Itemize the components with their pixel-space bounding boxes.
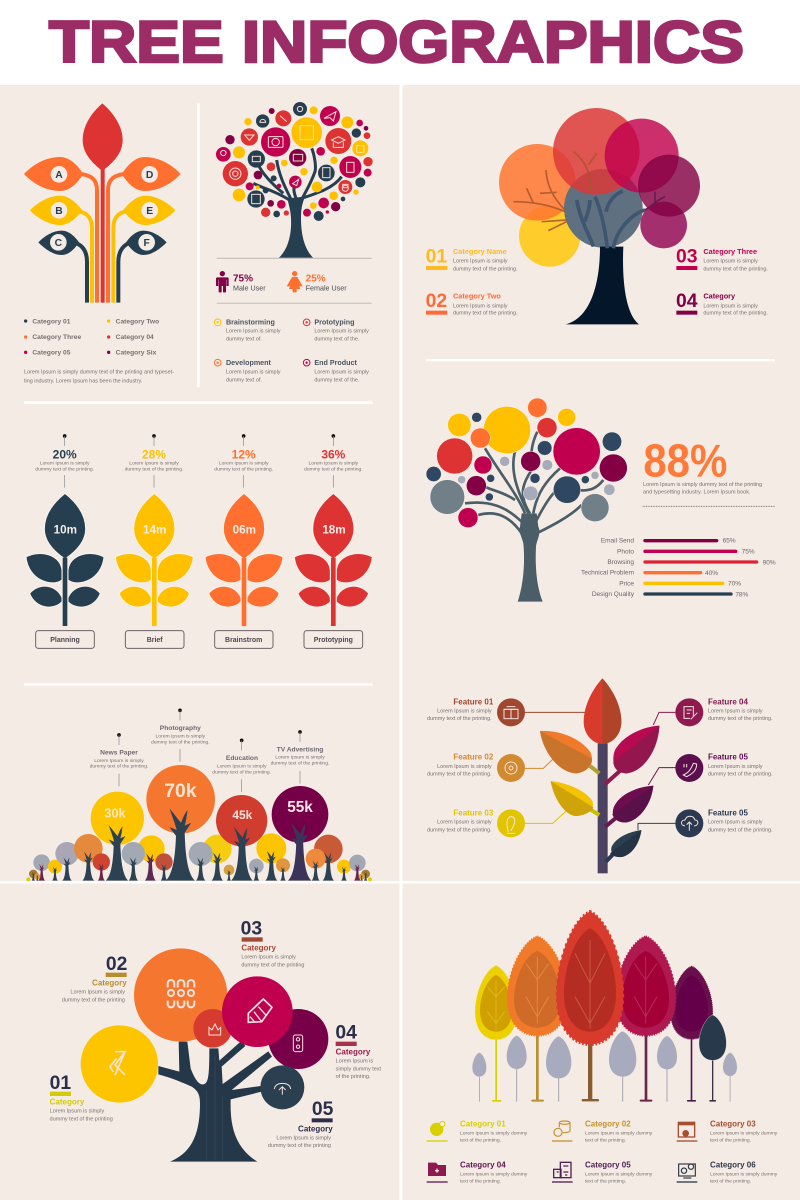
feature 03: dummy text of the printing. (427, 827, 492, 833)
plant brainstorm: 06m (233, 523, 256, 536)
legend category 06 (677, 1161, 778, 1184)
item prototyping: dummy text of the. (314, 337, 360, 343)
feature 05 cloud: Feature 05 (708, 808, 748, 817)
label 04: Lorem Ipsum is simply (703, 303, 758, 309)
leaf D (122, 157, 181, 191)
label 03: dummy text of the printing (241, 962, 304, 968)
bar chart: 78% (735, 592, 749, 599)
feature 04: Lorem Ipsum is simply (708, 709, 763, 715)
plant brief: 28% (142, 448, 166, 462)
item brainstorming: Lorem Ipsum is simply (226, 329, 281, 335)
category legend: Category Six (116, 350, 157, 357)
plant planning (26, 434, 104, 648)
legend category 02: text of the printing. (585, 1137, 626, 1143)
feature 05 phone: dummy text of the printing. (708, 772, 773, 778)
panel: leaf forest (427, 912, 778, 1184)
legend category 04: Category 04 (460, 1161, 506, 1170)
item development (214, 359, 281, 383)
circle 02 orange (134, 948, 227, 1042)
feature 02: Lorem Ipsum is simply (437, 764, 492, 770)
item development: Development (226, 359, 272, 367)
label 02: dummy text of the printing. (453, 311, 518, 317)
label 05: Lorem Ipsum is simply (276, 1136, 331, 1142)
branches (513, 152, 665, 248)
divider upper (217, 258, 372, 259)
label 04: Category (336, 1048, 371, 1057)
plum leaf (612, 786, 653, 822)
bar chart: 90% (763, 559, 776, 566)
item development: dummy text of. (226, 377, 262, 383)
yellow leaf tree (475, 966, 517, 1102)
leaf B: B (55, 206, 63, 217)
label 01: dummy text of the printing. (453, 266, 518, 272)
female user stat (287, 271, 347, 292)
legend category 05: text of the printing. (585, 1178, 626, 1184)
plant prototyping (294, 434, 372, 648)
label 04 (676, 291, 768, 317)
stem and side twigs (590, 743, 622, 873)
tree 30k news paper: Lorem Ipsum is simply (94, 758, 144, 764)
panel: 88 percent tree (426, 398, 776, 602)
item end product: Lorem Ipsum is simply (314, 369, 369, 375)
feature 03: Lorem Ipsum is simply (437, 820, 492, 826)
label 01: 01 (50, 1073, 71, 1094)
legend category 06: Category 06 (710, 1161, 756, 1170)
plant planning: 20% (53, 448, 77, 462)
plant brief: 14m (143, 523, 166, 536)
tree 55k tv advertising: dummy text of the printing. (271, 761, 329, 767)
label 04: of the printing. (336, 1074, 371, 1080)
tree 70k photography: 70k (164, 781, 197, 802)
female user stat: Female User (306, 284, 347, 292)
tree 45k education: 45k (232, 808, 253, 822)
circle 03 crimson (222, 976, 293, 1047)
plant prototyping: dummy text of the printing. (304, 467, 363, 473)
male user stat: 75% (233, 274, 253, 285)
label 02: 02 (106, 954, 127, 975)
feature 05 phone: Feature 05 (708, 753, 748, 762)
legend category 01 (427, 1120, 528, 1143)
bar chart: 40% (705, 570, 718, 577)
leaf E (123, 196, 175, 225)
paragraph: Lorem Ipsum is simply dummy text of the printing and typeset- (24, 370, 174, 376)
label 05 (268, 1099, 334, 1149)
legend category 01: text of the printing. (460, 1137, 501, 1143)
plant brainstorm: dummy text of the printing. (214, 467, 273, 473)
label 03: dummy text of the printing. (703, 266, 768, 272)
feature 01: Lorem Ipsum is simply (437, 709, 492, 715)
label 02: dummy text of the printing (62, 997, 125, 1003)
panel: forest stats (24, 683, 373, 881)
legend category 05: Lorem Ipsum is simply dummy (585, 1172, 653, 1178)
crimson leaf tree (616, 936, 676, 1102)
leaf A: A (55, 170, 63, 181)
legend category 05: Category 05 (585, 1161, 631, 1170)
plant prototyping: 36% (321, 448, 346, 462)
horizontal divider (24, 401, 373, 404)
feature 01: dummy text of the printing. (427, 716, 492, 722)
paragraph: ting industry. Lorem Ipsum has been the industry. (24, 378, 143, 384)
circle 01 yellow (81, 1025, 158, 1103)
label 03 (241, 918, 304, 968)
bar chart: Price (619, 580, 634, 587)
plant brainstorm: Lorem Ipsum is simply (219, 460, 269, 466)
panel: icon tree (214, 102, 373, 383)
feature 05 phone (675, 753, 773, 782)
tree 70k photography: dummy text of the printing. (151, 740, 210, 746)
paragraph: and typesetting industry. Lorem Ipsum book. (643, 489, 751, 495)
tree 55k tv advertising (271, 730, 329, 881)
feature 01 (427, 697, 525, 726)
tree 30k news paper: 30k (104, 806, 127, 820)
female user stat: 25% (306, 274, 326, 285)
label 02: Category Two (453, 292, 501, 301)
tree 45k education: Education (226, 755, 258, 762)
tree 30k news paper: dummy text of the printing. (90, 764, 148, 770)
circle 04 plum (268, 1009, 328, 1069)
foliage icons (221, 106, 364, 204)
legend category 06: Lorem Ipsum is simply dummy (710, 1172, 778, 1178)
leaf E: E (146, 206, 153, 217)
panel: ABC leaf stems (24, 103, 373, 404)
legend category 04 (427, 1161, 528, 1184)
feature 02: dummy text of the printing. (427, 772, 492, 778)
tree 45k education: dummy text of the printing. (212, 769, 271, 775)
small trees (26, 833, 372, 881)
feature 03: Feature 03 (453, 808, 494, 817)
label 03: 03 (241, 918, 262, 939)
label 02: Category (92, 979, 127, 988)
grey background leaf trees (472, 1031, 737, 1102)
dark leaf (610, 830, 641, 857)
legend category 05 (552, 1161, 653, 1184)
plant brainstorm: Brainstrom (225, 637, 262, 644)
label 02: 02 (426, 291, 447, 312)
leaf stems (77, 168, 128, 303)
feature 05 cloud: dummy text of the printing. (708, 827, 773, 833)
plant brief (115, 434, 193, 648)
yellow leaf (551, 781, 593, 816)
feature 04: Feature 04 (708, 697, 748, 706)
label 01: Category (50, 1098, 85, 1107)
plant prototyping: Prototyping (314, 637, 353, 644)
label 02 (426, 291, 518, 317)
divider (426, 359, 775, 361)
tree 55k tv advertising: TV Advertising (277, 747, 323, 754)
label 03: Category (241, 943, 276, 952)
feature 04 (675, 697, 773, 726)
plant brainstorm: 12% (232, 448, 256, 462)
translucent canopy (499, 108, 700, 267)
title band (0, 0, 800, 85)
plant planning: Lorem Ipsum is simply (40, 460, 90, 466)
tree 70k photography: Photography (160, 725, 201, 732)
label 02: Lorem Ipsum is simply (453, 303, 508, 309)
plant planning: dummy text of the printing. (35, 467, 94, 473)
feature 04: dummy text of the printing. (708, 716, 773, 722)
trunk and branches (158, 1041, 272, 1162)
label 01: Lorem Ipsum is simply (453, 258, 508, 264)
bar chart: Photo (617, 548, 634, 555)
item end product (303, 359, 369, 383)
label 03: Lorem Ipsum is simply (241, 955, 296, 961)
tree 70k photography: Lorem Ipsum is simply (156, 733, 206, 739)
legend category 02 (552, 1120, 653, 1143)
tree 45k education (212, 738, 271, 881)
bar chart: Browsing (607, 559, 634, 566)
label 03: Lorem Ipsum is simply (703, 258, 758, 264)
bar chart: Email Send (601, 538, 634, 545)
label 02 (62, 954, 127, 1003)
category legend (24, 318, 159, 357)
feature 01: Feature 01 (453, 697, 494, 706)
feature 05 phone: Lorem Ipsum is simply (708, 764, 763, 770)
legend category 02: Lorem Ipsum is simply dummy (585, 1131, 653, 1137)
category legend: Category 04 (116, 334, 154, 341)
leaf F: F (144, 238, 150, 249)
category legend: Category Three (32, 334, 81, 341)
top red leaf (584, 678, 621, 744)
plant brief: Lorem Ipsum is simply (129, 460, 179, 466)
dotted divider (643, 505, 775, 508)
label 05: 05 (312, 1099, 334, 1120)
label 04: Lorem Ipsum is (336, 1059, 373, 1065)
legend category 01: Lorem Ipsum is simply dummy (460, 1131, 528, 1137)
leaf C (38, 231, 79, 255)
item brainstorming: Brainstorming (226, 318, 275, 326)
label 01 (426, 246, 518, 272)
tree 55k tv advertising: 55k (287, 799, 313, 816)
legend category 03: text of the printing. (710, 1137, 751, 1143)
divider (24, 683, 373, 686)
bar chart: Technical Problem (581, 570, 634, 577)
tree trunk and branches (465, 432, 603, 602)
feature 05 cloud: Lorem Ipsum is simply (708, 820, 763, 826)
tree 45k education: Lorem Ipsum is simply (217, 763, 267, 769)
leaf F (126, 231, 167, 255)
plant planning: 10m (54, 523, 77, 536)
vertical divider (197, 103, 200, 387)
item prototyping (303, 318, 369, 343)
circle crown red (193, 1009, 232, 1048)
divider lower (217, 303, 372, 304)
plant planning: Planning (50, 637, 80, 644)
label 02: Lorem Ipsum is simply (70, 990, 125, 996)
panel: translucent circle tree (426, 108, 775, 361)
plum leaf tree (671, 966, 713, 1102)
feature 03 (427, 808, 525, 837)
item brainstorming (214, 318, 281, 343)
item end product: dummy text of the. (314, 377, 360, 383)
circle 05 dark (260, 1065, 304, 1109)
horizontal divider across page (0, 881, 800, 884)
label 01 (50, 1073, 113, 1122)
legend category 04: text of the printing. (460, 1178, 501, 1184)
item end product: End Product (314, 359, 357, 367)
male user stat: Male User (233, 284, 266, 292)
red leaf tree (557, 912, 623, 1101)
legend category 02: Category 02 (585, 1120, 631, 1129)
male user stat (216, 271, 266, 292)
leaf A (24, 157, 83, 191)
feature 02 (427, 753, 525, 782)
plant brief: Brief (147, 637, 163, 644)
legend category 03: Category 03 (710, 1120, 756, 1129)
bar chart: Design Quality (592, 591, 635, 598)
leaf B (30, 196, 82, 225)
label 01: Lorem Ipsum is simply (50, 1109, 104, 1115)
foliage circles (426, 398, 627, 528)
item prototyping: Lorem Ipsum is simply (314, 329, 369, 335)
plant prototyping: Lorem Ipsum is simply (309, 460, 359, 466)
label 05: Category (298, 1124, 333, 1133)
tree 70k photography (146, 708, 215, 881)
feature 05 cloud (675, 808, 773, 837)
label 04: Category (703, 292, 736, 301)
label 04: dummy text of the printing. (703, 311, 768, 317)
bar chart: 65% (723, 538, 736, 545)
big percent: 88% (643, 435, 727, 487)
leaf C: C (55, 238, 63, 249)
label 04: 04 (676, 291, 698, 312)
label 04: simply dummy text (336, 1066, 382, 1072)
label 01: 01 (426, 246, 447, 267)
foliage circles (216, 102, 373, 221)
panel: four leaf plants (26, 434, 372, 648)
category legend: Category 05 (32, 350, 71, 357)
paragraph (643, 482, 762, 495)
category legend: Category Two (116, 318, 159, 325)
label 01: dummy text of the printing (50, 1116, 113, 1122)
legend category 04: Lorem Ipsum is simply dummy (460, 1172, 528, 1178)
plant brief: dummy text of the printing. (125, 467, 183, 473)
label 05: dummy text of the printing (268, 1143, 331, 1149)
label 04 (335, 1022, 382, 1080)
paragraph (24, 370, 174, 384)
legend category 06: text of the printing. (710, 1178, 751, 1184)
label 04: 04 (335, 1022, 357, 1043)
legend category 03: Lorem Ipsum is simply dummy (710, 1131, 778, 1137)
legend category 03 (677, 1120, 778, 1143)
label 03 (676, 246, 768, 272)
panel: five category tree (50, 918, 382, 1162)
dark leaf tree (699, 1015, 726, 1102)
plant brainstorm (205, 434, 283, 648)
legend category 01: Category 01 (460, 1120, 506, 1129)
tree 30k news paper (90, 733, 148, 881)
orange leaf (540, 731, 592, 773)
connector lines (525, 712, 676, 830)
plant prototyping: 18m (322, 523, 346, 536)
item prototyping: Prototyping (314, 318, 354, 326)
item development: Lorem Ipsum is simply (226, 369, 281, 375)
top red leaf (83, 103, 123, 171)
tree 30k news paper: News Paper (100, 750, 138, 757)
bar chart: 70% (728, 581, 741, 588)
paragraph: Lorem Ipsum is simply dummy text of the printing (643, 482, 762, 488)
crimson leaf (613, 726, 659, 773)
feature 02: Feature 02 (453, 753, 494, 762)
label 03: 03 (676, 246, 698, 267)
tree trunk and branches (253, 148, 342, 258)
panel: feature branch (427, 678, 773, 873)
label 03: Category Three (703, 247, 757, 256)
leaf D: D (146, 170, 154, 181)
tree 55k tv advertising: Lorem Ipsum is simply (275, 755, 325, 761)
label 01: Category Name (453, 247, 507, 256)
orange leaf tree (507, 936, 567, 1102)
bar chart (581, 538, 776, 599)
category legend: Category 01 (32, 318, 71, 325)
bar chart: 75% (742, 548, 755, 555)
tree trunk (566, 247, 639, 324)
centre vertical divider (400, 85, 402, 1200)
title: TREE INFOGRAPHICS (49, 10, 744, 75)
item brainstorming: dummy text of. (226, 337, 262, 343)
